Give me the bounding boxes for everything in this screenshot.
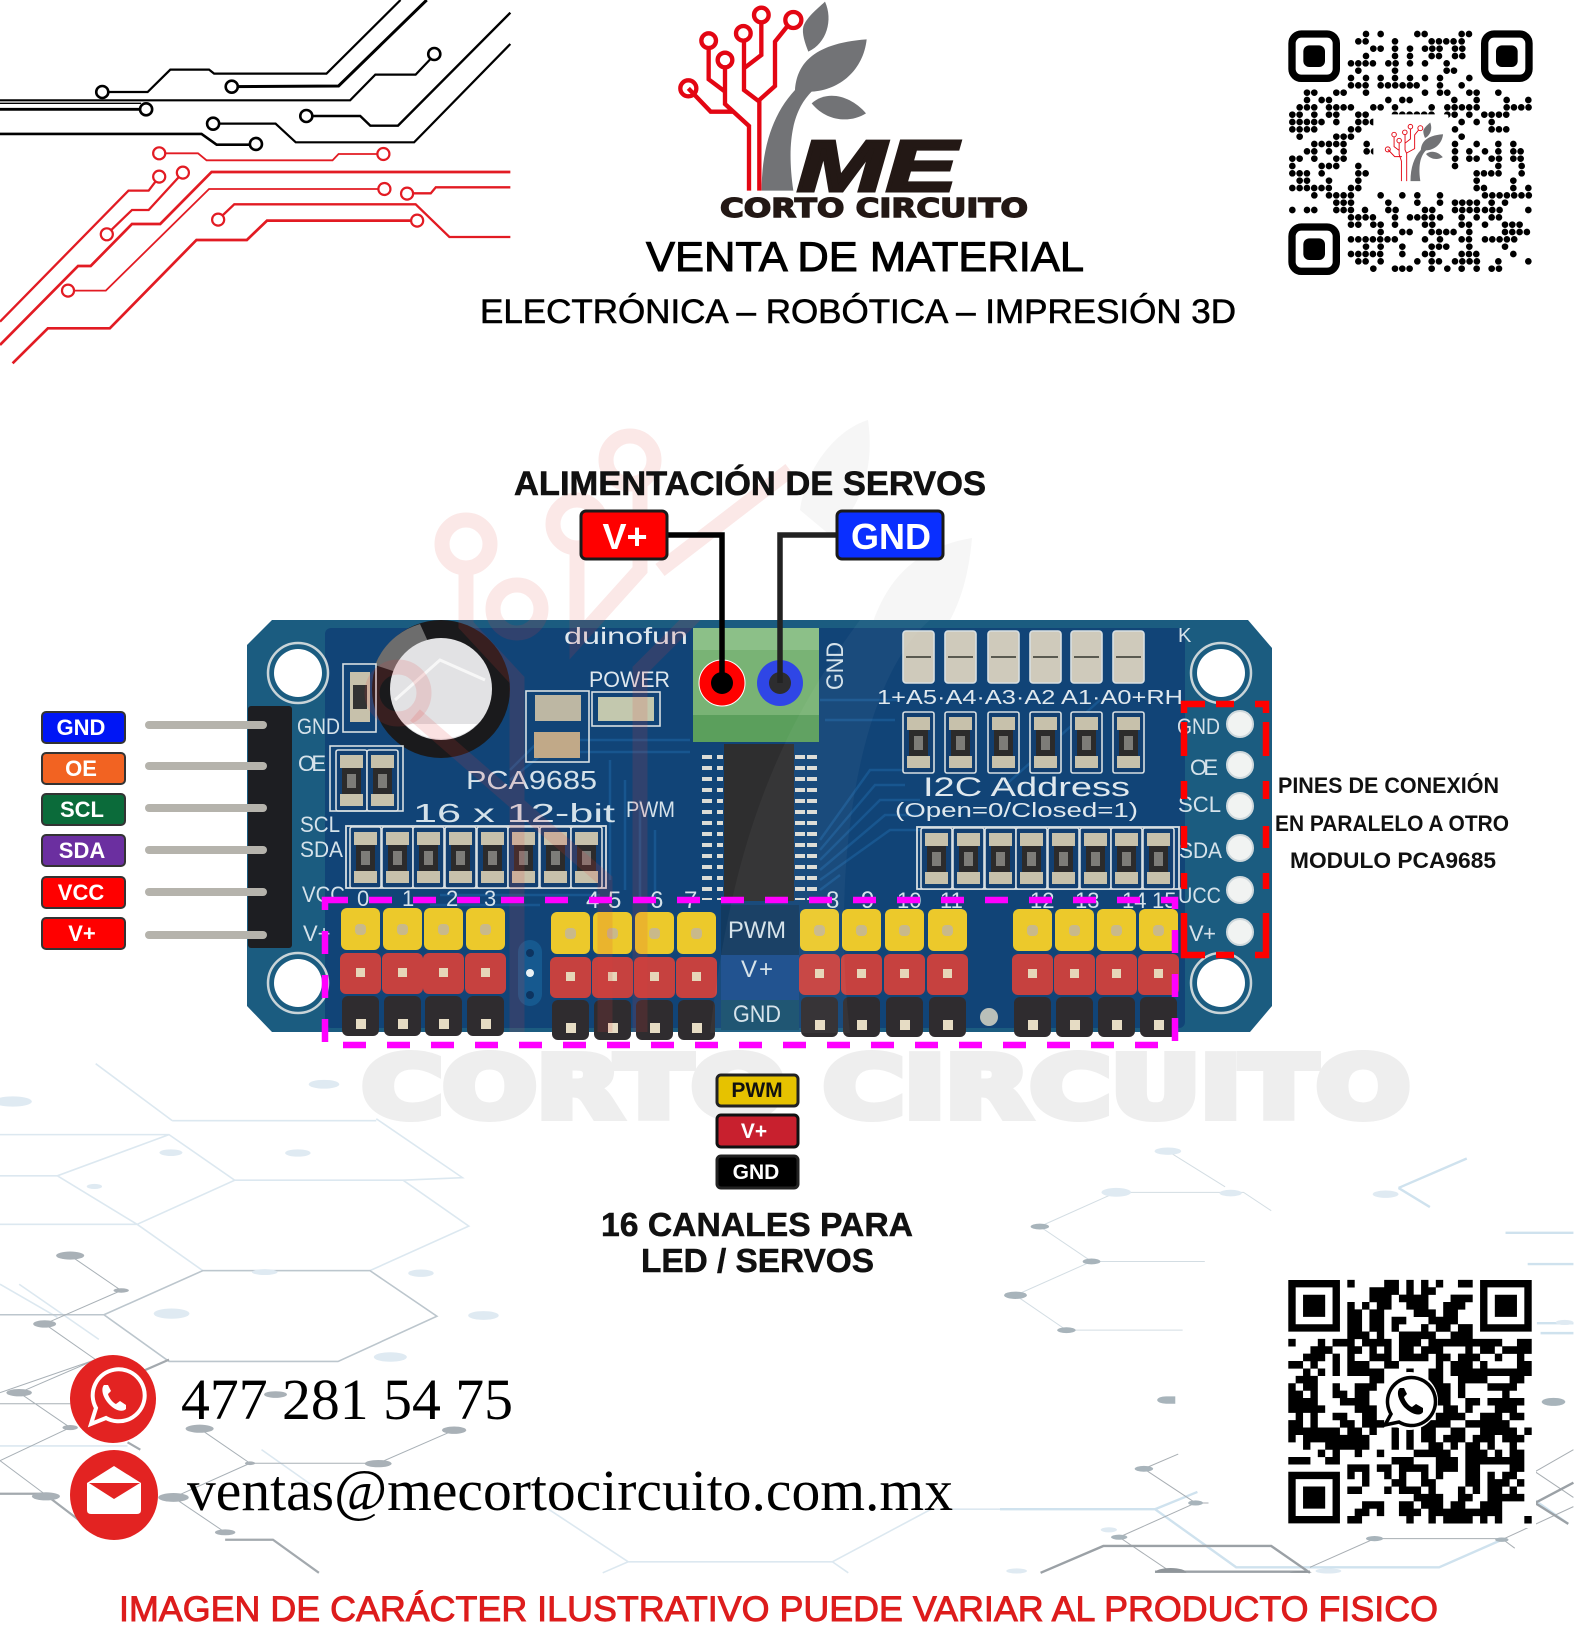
silkscreen text: OE: [298, 751, 326, 776]
logo: ME Corto Circuito: [680, 2, 1028, 224]
pcb body: [247, 620, 1272, 1032]
text: 16 channels: 16 CANALES PARA: [601, 1206, 913, 1243]
heading: servo power: ALIMENTACIÓN DE SERVOS: [514, 465, 986, 503]
title: VENTA DE MATERIAL: [646, 233, 1084, 280]
silkscreen text: PCA9685: [466, 765, 597, 795]
left pin labels: SDA: [59, 838, 105, 863]
silkscreen text: PWM: [728, 917, 786, 944]
small components: [330, 664, 660, 811]
through holes: [518, 940, 998, 1026]
text: parallel pins note: PINES DE CONEXIÓN: [1278, 773, 1499, 798]
phone number: 477 281 54 75: [181, 1367, 513, 1432]
silkscreen text: SCL: [300, 812, 340, 837]
icon: email: [70, 1450, 158, 1540]
silkscreen text: duinofun: [564, 623, 688, 649]
silkscreen text: V+: [1189, 921, 1216, 946]
silkscreen text: SDA: [1179, 838, 1222, 863]
circuit traces top left: [0, 0, 510, 363]
label: GND: [837, 511, 943, 559]
silkscreen text: 15: [1152, 888, 1176, 913]
silkscreen text: 6: [650, 887, 663, 914]
text: 16 channels: [601, 1206, 913, 1279]
resistors left: [346, 826, 606, 888]
chip: [707, 744, 812, 901]
left pin labels: VCC: [58, 880, 104, 905]
silkscreen text: 5: [608, 887, 621, 914]
silkscreen text: 10: [897, 888, 921, 913]
watermark: tree logo behind board: [442, 436, 790, 680]
left pin labels: V+: [68, 921, 96, 946]
label: GND: GND: [851, 516, 931, 557]
text: 16 channels: LED / SERVOS: [641, 1242, 874, 1279]
label: V+: [581, 511, 667, 559]
jumper pins channels 0-3: [340, 908, 506, 1036]
silkscreen text: GND: [822, 642, 849, 690]
logo: ME Corto Circuito: ME: [797, 127, 960, 207]
text: parallel pins note: EN PARALELO A OTRO: [1275, 811, 1509, 836]
dashed box: 16 channels: [325, 900, 1175, 1045]
circuit background: hexagon network bottom: [0, 1064, 1573, 1574]
silkscreen text: [297, 623, 1222, 1028]
silkscreen text: (Open=0/Closed=1): [895, 800, 1138, 822]
label: V+: V+: [602, 516, 648, 557]
centre strip labels background: [721, 905, 799, 1030]
silkscreen text: GND: [1177, 714, 1220, 739]
silkscreen text: 0: [357, 886, 369, 911]
right side pads: [1227, 711, 1253, 945]
silkscreen text: PWM: [626, 797, 675, 822]
jumper pins channels 12-15: [1012, 909, 1179, 1037]
wire: V+ to terminal: [668, 535, 722, 683]
terminal block: [693, 628, 819, 742]
QR code: website (dotted): [1292, 34, 1529, 271]
legend: channel pins: GND: [733, 1161, 779, 1184]
footer disclaimer: IMAGEN DE CARÁCTER ILUSTRATIVO PUEDE VARIAR AL PRODUCTO FISICO: [119, 1590, 1438, 1629]
jumper pins channels 8-11: [799, 909, 968, 1037]
I2C resistors: [903, 712, 1144, 773]
wire: GND to terminal: [780, 535, 836, 683]
QR code: whatsapp: [1284, 1276, 1536, 1528]
silkscreen text: V+: [741, 956, 773, 983]
capacitor: [372, 620, 510, 758]
silkscreen text: GND: [297, 714, 340, 739]
watermark: brand text: CORTO CIRCUITO: [362, 1039, 1410, 1138]
jumper pins channels 4-7: [550, 912, 717, 1040]
silkscreen text: UCC: [1178, 883, 1221, 908]
silkscreen text: 12: [1030, 888, 1054, 913]
legend: channel pins: V+: [741, 1120, 767, 1143]
left pin labels: GND: [57, 715, 105, 740]
dashed box: parallel pins: [1184, 704, 1266, 955]
watermark tree over board: [364, 620, 700, 1032]
email address: ventas@mecortocircuito.com.mx: [187, 1458, 953, 1523]
resistors right: [917, 827, 1179, 889]
pcb inner area: [325, 628, 1185, 1028]
silkscreen text: 2: [446, 886, 458, 911]
silkscreen text: 1: [402, 886, 414, 911]
legend: channel pins: PWM: [731, 1079, 783, 1102]
silkscreen text: 16 x 12-bit: [413, 798, 616, 828]
silkscreen text: 14: [1122, 888, 1146, 913]
pcb traces: [430, 700, 1100, 905]
icon: whatsapp: [70, 1355, 156, 1443]
text: parallel pins note: MODULO PCA9685: [1290, 848, 1496, 873]
silkscreen text: V+: [303, 921, 331, 946]
legend: channel pins: [717, 1075, 798, 1188]
silkscreen text: K: [1178, 625, 1192, 647]
left pin labels: SCL: [60, 797, 104, 822]
silkscreen text: 1+A5·A4·A3·A2 A1·A0+RH: [877, 687, 1183, 709]
silkscreen text: SCL: [1178, 792, 1221, 817]
silkscreen text: 3: [484, 886, 496, 911]
header pins: [145, 706, 292, 948]
subtitle: ELECTRÓNICA – ROBÓTICA – IMPRESIÓN 3D: [480, 293, 1236, 331]
silkscreen text: POWER: [589, 667, 670, 692]
watermark leaf over board: [710, 620, 930, 1033]
silkscreen text: 8: [826, 887, 839, 914]
left pin labels: [42, 712, 125, 949]
silkscreen text: OE: [1190, 755, 1218, 780]
logo: ME Corto Circuito: CORTO CIRCUITO: [720, 194, 1028, 224]
board: PCA9685 module: [145, 620, 1272, 1040]
silkscreen text: 9: [861, 887, 874, 914]
watermark: grey leaves behind board: [760, 420, 972, 1030]
mounting holes: [268, 643, 1251, 1013]
silkscreen text: 11: [940, 888, 963, 913]
silkscreen text: VCC: [302, 882, 345, 907]
silkscreen text: SDA: [300, 837, 343, 862]
left pin labels: OE: [65, 756, 97, 781]
silkscreen text: I2C Address: [923, 772, 1130, 802]
I2C solder pads: [903, 631, 1144, 683]
silkscreen text: 4: [586, 887, 599, 914]
silkscreen text: 13: [1075, 888, 1099, 913]
silkscreen text: GND: [733, 1001, 781, 1028]
text: parallel pins note: [1275, 773, 1509, 873]
silkscreen text: 7: [684, 887, 697, 914]
